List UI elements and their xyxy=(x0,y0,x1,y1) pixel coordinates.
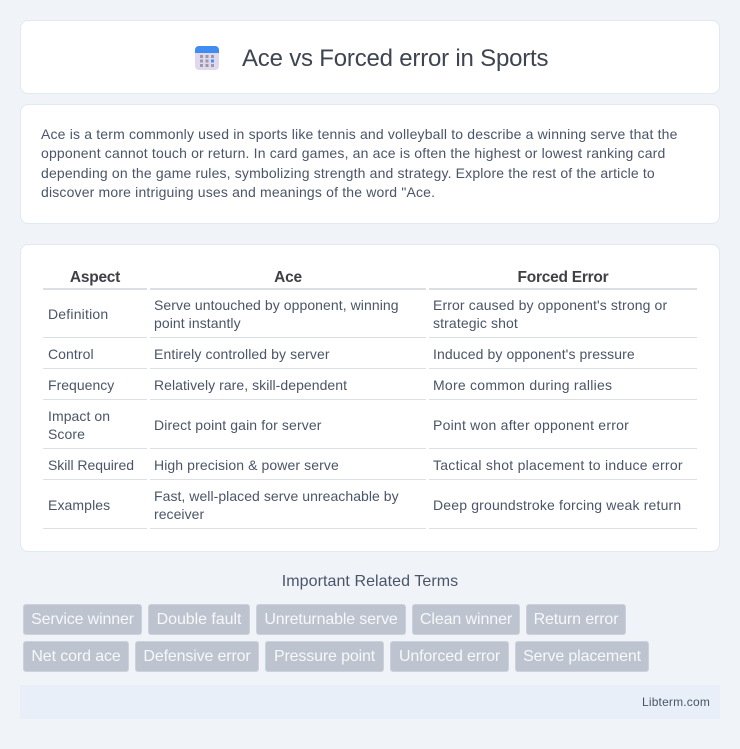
intro paragraph xyxy=(41,126,678,200)
tag xyxy=(148,604,250,635)
row: frequency: More common during rallies xyxy=(433,377,612,393)
row: frequency xyxy=(48,377,612,393)
tag: Pressure point xyxy=(274,648,375,665)
tag xyxy=(23,604,142,635)
related terms heading: Important Related Terms xyxy=(282,573,458,590)
footer xyxy=(20,685,720,719)
table header xyxy=(70,269,608,286)
row: examples: Deep groundstroke forcing weak return xyxy=(433,497,681,513)
row: definition: point instantly xyxy=(154,315,241,331)
tag xyxy=(390,641,509,672)
row: control: Control xyxy=(48,346,94,362)
row: skill required: High precision & power serve xyxy=(154,457,339,473)
table header: Aspect xyxy=(70,269,120,286)
tag: Clean winner xyxy=(420,611,512,628)
row: impact on score: Point won after opponent error xyxy=(433,417,629,433)
tag: Unforced error xyxy=(399,648,500,665)
tag: Return error xyxy=(534,611,618,628)
title: Ace vs Forced error in Sports xyxy=(242,45,548,72)
tag: Service winner xyxy=(31,611,134,628)
panel: related term tags xyxy=(23,604,649,672)
tag: Defensive error xyxy=(143,648,251,665)
tag xyxy=(515,641,649,672)
icon: calendar xyxy=(195,46,219,70)
row: control: Induced by opponent's pressure xyxy=(433,346,635,362)
tag xyxy=(256,604,406,635)
footer credit: Libterm.com xyxy=(642,695,710,709)
row: impact on score: Direct point gain for server xyxy=(154,417,322,433)
row: definition: strategic shot xyxy=(433,315,518,331)
intro paragraph: discover more intriguing uses and meanings of the word "Ace. xyxy=(41,184,435,200)
row: definition: Definition xyxy=(48,306,108,322)
table header: Forced Error xyxy=(518,269,608,286)
header panel xyxy=(20,20,720,94)
intro paragraph: opponent cannot touch or return. In card games, an ace is often the highest or lowest ranking card xyxy=(41,145,665,161)
table header: Ace xyxy=(274,269,302,286)
row: impact on score: Score xyxy=(48,426,85,442)
row: impact on score: Impact on xyxy=(48,408,110,424)
tag xyxy=(265,641,384,672)
panel: intro text xyxy=(20,104,720,224)
tag: Net cord ace xyxy=(31,648,121,665)
row: frequency: Relatively rare, skill-dependent xyxy=(154,377,347,393)
row: definition: Serve untouched by opponent, winning xyxy=(154,297,399,313)
intro paragraph: Ace is a term commonly used in sports like tennis and volleyball to describe a winning serve that the xyxy=(41,126,678,142)
row: skill required: Skill Required xyxy=(48,457,134,473)
row: skill required: Tactical shot placement to induce error xyxy=(433,457,683,473)
intro paragraph: depending on the game rules, symbolizing strength and strategy. Explore the rest of the article to xyxy=(41,165,655,181)
row: impact on score xyxy=(48,408,629,442)
row: control: Entirely controlled by server xyxy=(154,346,330,362)
tag xyxy=(135,641,259,672)
row: frequency: Frequency xyxy=(48,377,114,393)
tag xyxy=(412,604,520,635)
tag xyxy=(23,641,129,672)
row: examples: Fast, well-placed serve unreachable by xyxy=(154,488,399,504)
row: examples xyxy=(48,488,681,522)
tag: Double fault xyxy=(157,611,241,628)
row: examples: Examples xyxy=(48,497,110,513)
tag: Serve placement xyxy=(523,648,641,665)
row: control xyxy=(48,346,635,362)
tag: Unreturnable serve xyxy=(264,611,398,628)
row: skill required xyxy=(48,457,683,473)
row: examples: receiver xyxy=(154,506,204,522)
row: definition: Error caused by opponent's strong or xyxy=(433,297,667,313)
panel: comparison table xyxy=(20,244,720,552)
tag xyxy=(526,604,626,635)
row: definition xyxy=(48,297,667,331)
